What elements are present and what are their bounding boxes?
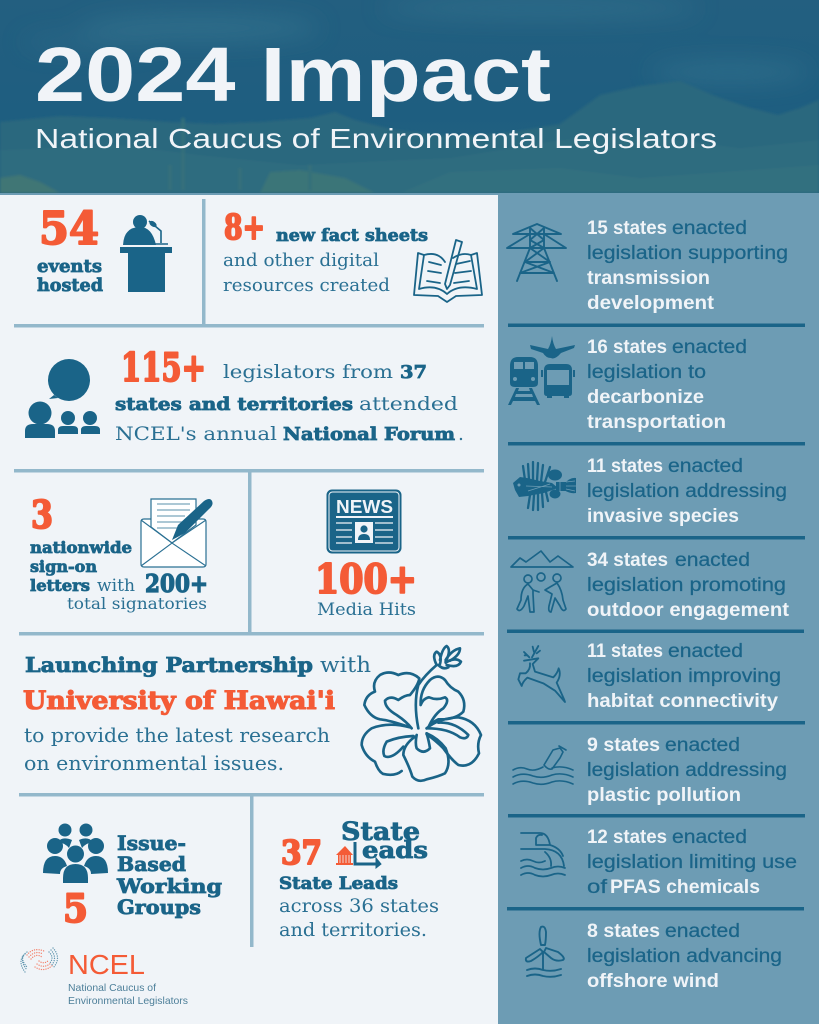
legislation item: outdoor engagement: 34 states — [587, 550, 668, 571]
stat: nationwide sign-on letters: total signatories — [67, 594, 207, 613]
legislation item: outdoor engagement: outdoor engagement — [587, 600, 790, 621]
icon: hibiscus flower — [362, 646, 481, 781]
stat: new fact sheets: and other digital — [223, 250, 379, 271]
legislation item: offshore wind: enacted — [665, 921, 740, 942]
logo: NCEL: NCEL — [68, 949, 145, 980]
legislation item: PFAS chemicals — [587, 827, 797, 898]
legislation item: invasive species: enacted — [668, 456, 743, 477]
legislation item: invasive species: legislation addressing — [587, 481, 787, 502]
stat: 115+ legislators — [115, 345, 464, 445]
stat: 54 events hosted: events — [37, 256, 102, 277]
icon: audience with speech bubble — [25, 359, 100, 438]
stat: new fact sheets: resources created — [223, 275, 390, 296]
legislation item: plastic pollution: plastic pollution — [587, 785, 741, 806]
icon: state leads logo: State — [341, 817, 420, 846]
legislation item: PFAS chemicals: enacted — [672, 827, 747, 848]
legislation item: transportation: 16 states — [587, 337, 667, 358]
legislation item: habitat connectivity: legislation improving — [587, 666, 781, 687]
stat: 37 state leads: State Leads — [279, 874, 398, 893]
stat: 115+ legislators: 115+ — [121, 345, 206, 391]
stat: 115+ legislators: NCEL's annual — [115, 424, 277, 445]
subtitle: National Caucus of Environmental Legislators — [35, 123, 717, 154]
legislation item: offshore wind: offshore wind — [587, 971, 719, 992]
icon: newspaper — [327, 490, 401, 553]
legislation item: transportation: enacted — [672, 337, 747, 358]
legislation item: plastic pollution: 9 states — [587, 735, 660, 756]
stat: 37 state leads — [279, 833, 439, 941]
legislation item: transmission: 15 states — [587, 218, 667, 239]
stat: 115+ legislators: . — [458, 424, 464, 445]
stat: 115+ legislators: states and territories — [115, 394, 353, 415]
legislation item: transmission — [587, 218, 788, 314]
legislation item: transportation: decarbonize — [587, 387, 704, 408]
stat: nationwide sign-on letters: letters — [30, 576, 90, 595]
icon: podium speaker — [120, 215, 172, 292]
stat: 54 events hosted: 54 — [39, 202, 99, 255]
legislation item: transportation: legislation to — [587, 362, 706, 383]
icon: state leads logo — [336, 817, 428, 868]
legislation item: PFAS chemicals: PFAS chemicals — [610, 877, 760, 898]
stat: new fact sheets: new fact sheets — [276, 226, 428, 246]
stat: 115+ legislators: 37 — [400, 362, 427, 383]
stat: new fact sheets: 8+ — [224, 207, 265, 248]
legislation item: outdoor engagement: legislation promoting — [587, 575, 786, 596]
partnership text block: on environmental issues. — [24, 751, 284, 775]
partnership text block: Launching Partnership — [25, 653, 313, 677]
partnership text block: with — [320, 653, 371, 677]
stat: 5 working groups: Groups — [117, 895, 201, 919]
legislation item: habitat connectivity — [587, 641, 781, 712]
panel: left background — [0, 195, 498, 1024]
stat: 100+ media hits: 100+ — [315, 556, 417, 603]
legislation item: outdoor engagement: enacted — [675, 550, 750, 571]
stat: nationwide sign-on letters: nationwide — [30, 538, 132, 557]
legislation item: transportation — [587, 337, 747, 433]
stat: 100+ media hits: Media Hits — [317, 600, 416, 620]
stat: 115+ legislators: attended — [359, 394, 458, 415]
legislation item: invasive species: 11 states — [587, 456, 663, 477]
legislation item: invasive species — [587, 456, 787, 527]
stat: 5 working groups: Working — [116, 874, 222, 898]
legislation item: offshore wind: legislation advancing — [587, 946, 782, 967]
legislation item: PFAS chemicals: of — [587, 877, 608, 898]
icon: offshore wind turbine — [526, 927, 564, 977]
icon: lionfish — [513, 462, 576, 510]
stat: 115+ legislators: National Forum — [283, 424, 455, 445]
stat: nationwide sign-on letters: with — [97, 576, 135, 595]
legislation item: habitat connectivity: enacted — [668, 641, 743, 662]
header banner: desert mountain photo — [0, 0, 819, 193]
logo: NCEL — [21, 948, 188, 1007]
icon: working group people — [43, 824, 108, 883]
stat: 5 working groups: 5 — [63, 886, 88, 932]
stat: 5 working groups: Based — [117, 852, 186, 876]
stat: new fact sheets — [223, 207, 428, 296]
legislation item: PFAS chemicals: 12 states — [587, 827, 667, 848]
icon: plastic bottle in waves — [513, 746, 573, 784]
legislation item: invasive species: invasive species — [587, 506, 739, 527]
legislation item: PFAS chemicals: legislation limiting use — [587, 852, 797, 873]
legislation item: offshore wind: 8 states — [587, 921, 660, 942]
stat: 5 working groups: Issue- — [117, 831, 186, 855]
legislation item: transmission: transmission — [587, 268, 710, 289]
logo: NCEL: National Caucus of — [68, 982, 156, 994]
icon: envelope with letter and pen — [141, 499, 213, 567]
legislation item: transmission: development — [587, 293, 715, 314]
icon: open book and pen — [414, 240, 482, 302]
stat: 5 working groups — [63, 831, 222, 932]
partnership text block: to provide the latest research — [24, 723, 330, 747]
icon: state leads logo: eads — [362, 837, 428, 864]
logo: NCEL: Environmental Legislators — [68, 995, 188, 1007]
icon: transmission tower — [507, 224, 566, 281]
legislation item: transmission: enacted — [672, 218, 747, 239]
stat: 100+ media hits — [315, 556, 417, 620]
stat: 37 state leads: 37 — [281, 833, 322, 872]
partnership text block: University of Hawai'i — [23, 686, 335, 715]
icon: leaping deer — [518, 646, 565, 702]
stat: 37 state leads: and territories. — [279, 920, 427, 941]
stat: 54 events hosted: hosted — [37, 275, 103, 296]
legislation item: offshore wind — [587, 921, 782, 992]
partnership text block — [23, 653, 371, 775]
legislation item: habitat connectivity: habitat connectivity — [587, 691, 778, 712]
legislation item: plastic pollution: legislation addressing — [587, 760, 787, 781]
legislation item: outdoor engagement — [587, 550, 790, 621]
stat: 115+ legislators: legislators from — [223, 362, 394, 383]
icon: discharge pipe — [521, 833, 565, 876]
icon: plane, train and bus — [508, 336, 575, 405]
legislation item: transmission: legislation supporting — [587, 243, 788, 264]
stat: 54 events hosted — [37, 202, 103, 296]
title: 2024 Impact — [35, 32, 551, 118]
legislation item: plastic pollution — [587, 735, 787, 806]
panel: right background — [498, 193, 819, 1024]
stat: 37 state leads: across 36 states — [279, 896, 439, 917]
stat: nationwide sign-on letters: 3 — [31, 492, 53, 537]
icon: outdoor engagement — [511, 551, 573, 612]
stat: nationwide sign-on letters: sign-on — [30, 557, 97, 576]
icon: newspaper: NEWS — [336, 497, 393, 517]
legislation item: plastic pollution: enacted — [665, 735, 740, 756]
legislation item: transportation: transportation — [587, 412, 726, 433]
stat: nationwide sign-on letters — [30, 492, 208, 613]
stat: nationwide sign-on letters: 200+ — [145, 569, 208, 598]
legislation item: habitat connectivity: 11 states — [587, 641, 663, 662]
